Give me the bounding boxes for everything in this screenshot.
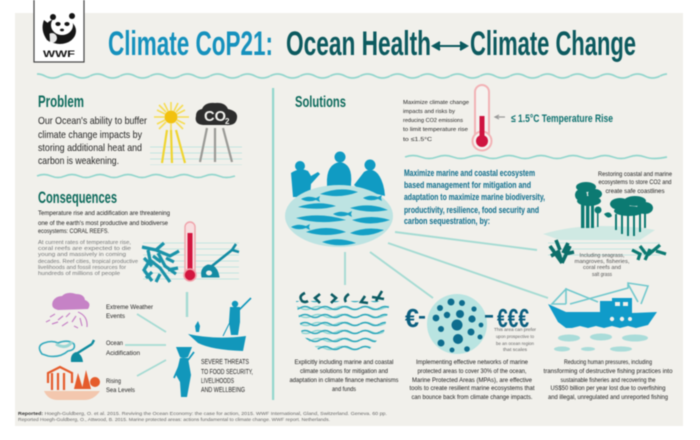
main solution text: productivity, resilience, food security and — [404, 205, 539, 216]
consequences text: ecosystems: CORAL REEFS. — [38, 228, 109, 235]
protected areas text: Implementing effective networks of marine — [416, 359, 528, 366]
icon: marine protected area: € — [405, 303, 419, 333]
protected area note: be an ocean region — [496, 341, 534, 347]
arrow: two-way link — [433, 42, 467, 50]
label: extreme weather: Events — [106, 313, 126, 320]
icon: CO2 cloud — [196, 103, 237, 162]
temperature text: impacts and risks by — [403, 109, 455, 115]
ecosystem note: Including seagrass, — [580, 253, 624, 259]
icon: restoring ecosystems — [543, 171, 672, 278]
coral note — [38, 240, 138, 277]
main solution text: Maximize marine and coastal ecosystem — [404, 168, 535, 179]
protected area note: upon prospective to — [496, 334, 534, 340]
temperature text — [403, 100, 469, 143]
protected area note: This area can prefer — [494, 327, 536, 333]
problem text: Our Ocean's ability to buffer — [38, 115, 147, 127]
icon: marine protected area: €€€ — [497, 303, 529, 333]
icon: acid dropper — [202, 244, 239, 277]
icon: thermometer — [184, 222, 196, 281]
title — [108, 25, 636, 63]
heading: consequences: Consequences — [38, 188, 117, 207]
temperature text: to ≤1.5°C — [403, 137, 432, 143]
icon: marine protected area — [405, 294, 529, 354]
ecosystem note: mangroves, fisheries, — [574, 259, 630, 265]
ecosystem note: salt grass — [592, 272, 612, 278]
icon: ocean acidification — [39, 340, 94, 362]
problem text: climate change impacts by — [38, 129, 143, 141]
finance text: adaptation in climate finance mechanisms — [290, 377, 399, 384]
problem text: carbon is weakening. — [38, 155, 119, 167]
label: rising sea levels: Sea Levels — [106, 387, 136, 394]
sources: Reported: Hoegh-Guldberg, O. et al. 2015. Reviving the Ocean Economy: the case for action, 2015. WWF International, Gland, Switzerland. Geneva. 60 pp. — [18, 411, 387, 416]
restoring text: ecosystems to store CO2 and — [598, 179, 672, 186]
coral note: coral reefs are expected to die — [38, 246, 131, 252]
main solution text: based management for mitigation and — [404, 180, 531, 191]
icon: water lines — [150, 146, 242, 165]
protected areas text: tools to create resilient marine ecosystems that — [410, 385, 535, 392]
label: rising sea levels — [106, 378, 136, 394]
protected areas text: protected areas to cover 30% of the ocean, — [418, 368, 527, 375]
fishing text — [544, 359, 673, 401]
label: ocean acidification: Acidification — [106, 350, 140, 357]
panel: consequences — [38, 188, 253, 400]
sources — [18, 411, 387, 422]
consequences text: Temperature rise and acidification are threatening — [38, 210, 170, 217]
icon: CO2 cloud: 2 — [225, 117, 230, 126]
problem text — [38, 115, 147, 167]
arrow: temperature target — [495, 115, 505, 119]
ecosystem note — [574, 253, 630, 278]
icon: people around ocean — [285, 152, 393, 247]
problem text: storing additional heat and — [38, 142, 142, 154]
sources: Reported Hoegh-Guldberg, O., Attwood, B. 2015. Marine protected areas: actions fundamental to climate change. WWF report. Netherlands. — [18, 417, 330, 422]
finance text — [290, 359, 399, 393]
arrows: threats converge — [125, 314, 166, 376]
restoring text — [598, 171, 672, 195]
restoring text: Restoring coastal and marine — [598, 171, 672, 178]
icon: woman with basket — [174, 347, 194, 397]
protected areas text — [410, 359, 535, 401]
coral note: hundreds of millions of people — [38, 271, 120, 277]
fishing text: transforming of destructive fishing practices into — [544, 368, 673, 375]
finance text: climate solutions for mitigation and — [300, 368, 388, 375]
label: extreme weather — [106, 304, 154, 320]
consequences text: one of the earth's most productive and biodiverse — [38, 220, 168, 227]
icon: fishing boat — [548, 283, 657, 352]
icon: extreme weather cloud — [46, 293, 89, 328]
icon: fisherman on boat — [188, 298, 251, 351]
mangrove trees — [604, 196, 653, 236]
label: rising sea levels: Rising — [106, 378, 121, 385]
seaweed right — [632, 245, 666, 260]
label: severe threats: TO FOOD SECURITY, — [201, 367, 253, 376]
logo: WWF panda — [34, 0, 84, 62]
fishing text: sustainable fisheries and recovering the — [560, 377, 656, 384]
palm trees — [575, 182, 602, 228]
coral note: At current rates of temperature rise, — [38, 240, 131, 246]
restoring text: create safe coastlines — [606, 188, 664, 195]
main solution text — [404, 168, 545, 227]
fishing text: and illegal, unregulated and unreported fishing — [548, 394, 668, 401]
temperature text: to limit temperature rise — [403, 127, 468, 133]
panel: solutions — [285, 85, 673, 401]
label: severe threats: LIVELIHOODS — [201, 376, 234, 385]
protected area note: that scales — [503, 347, 528, 353]
label: severe threats: AND WELLBEING — [201, 385, 245, 394]
icon: rising sea levels — [44, 367, 100, 400]
seaweed left — [550, 240, 574, 263]
title: Ocean Health — [286, 25, 431, 63]
temperature text: reducing CO2 emissions — [403, 118, 463, 124]
temperature target: ≤ 1.5°C Temperature Rise — [511, 113, 613, 125]
label: ocean acidification — [106, 340, 140, 357]
main solution text: adaptation to maximize marine biodiversity, — [404, 192, 545, 203]
consequences text — [38, 210, 170, 235]
people — [291, 152, 385, 197]
label: severe threats: SEVERE THREATS — [201, 357, 249, 366]
label: ocean acidification: Ocean — [106, 340, 123, 347]
coral note: young and massively in coming — [38, 252, 126, 258]
label: severe threats — [201, 357, 253, 394]
protected areas text: can bounce back from climate change impacts. — [412, 394, 533, 401]
title: Climate CoP21: — [108, 25, 273, 63]
icon: finance waves — [290, 291, 394, 352]
heading: problem: Problem — [38, 92, 84, 111]
icon: thermometer — [472, 85, 492, 150]
main solution text: carbon sequestration, by: — [404, 216, 490, 227]
fishing text: US$50 billion per year lost due to overfishing — [550, 385, 666, 392]
panel: problem — [38, 92, 242, 167]
finance text: Explicitly including marine and coastal — [294, 359, 394, 366]
icon: CO2 cloud: CO — [204, 108, 226, 125]
coral note: decades. Reef cities, tropical productive — [38, 259, 138, 265]
heading: solutions: Solutions — [295, 94, 346, 111]
label: extreme weather: Extreme Weather — [106, 304, 154, 311]
icon: water lines — [143, 241, 239, 283]
logo: WWF panda: WWF — [43, 49, 76, 59]
arrow: to threats — [186, 292, 188, 317]
finance text: and funds — [332, 386, 357, 393]
fishing text: Reducing human pressures, including — [564, 359, 652, 366]
coral note: livelihoods and fossil resources for — [38, 265, 126, 271]
protected area note — [494, 327, 536, 353]
ecosystem note: coral reefs and — [583, 265, 621, 271]
temperature text: Maximize climate change — [403, 100, 469, 106]
icon: sun — [154, 102, 189, 163]
protected areas text: Marine Protected Areas (MPAs), are effective — [412, 377, 532, 384]
icon: coral — [142, 243, 179, 282]
arrows: solution branches — [345, 232, 548, 298]
